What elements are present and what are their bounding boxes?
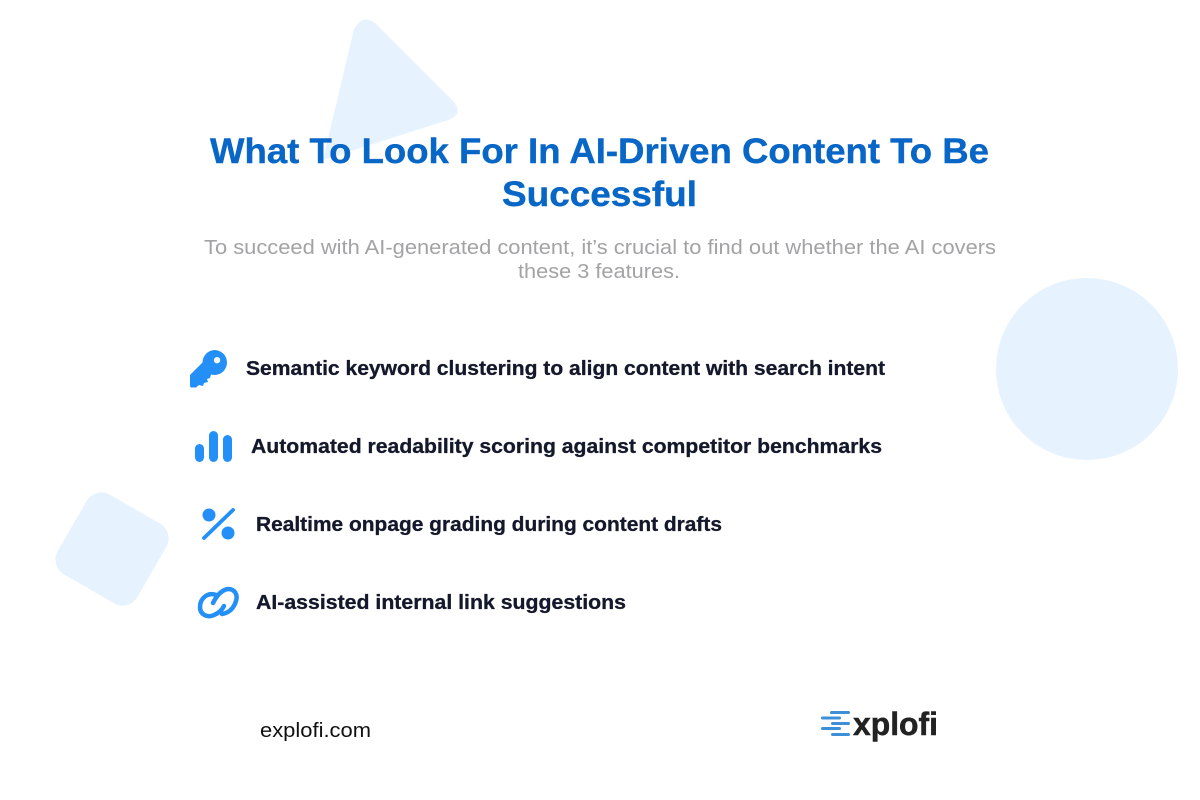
title: Successful	[502, 174, 697, 214]
subtitle: these 3 features.	[518, 261, 680, 283]
icon: bar chart	[195, 431, 232, 462]
text: readability scoring: Automated readability scoring against competitor benchmarks	[251, 436, 882, 458]
text: onpage grading: Realtime onpage grading during content drafts	[256, 514, 722, 536]
website url: explofi.com	[260, 720, 371, 742]
decorative circle	[996, 278, 1178, 460]
title	[210, 131, 989, 214]
logo wordmark: xplofi	[853, 706, 938, 742]
feature: onpage grading	[202, 508, 722, 540]
text: internal links: AI-assisted internal link suggestions	[256, 592, 626, 614]
subtitle: To succeed with AI-generated content, it’s crucial to find out whether the AI covers	[204, 237, 996, 259]
icon: chain link	[200, 589, 237, 616]
feature: internal links	[200, 589, 626, 616]
text: keyword clustering: Semantic keyword clustering to align content with search intent	[246, 358, 885, 380]
subtitle	[204, 237, 996, 283]
logo mark	[821, 711, 850, 736]
icon: key	[190, 350, 227, 388]
logo: explofi	[821, 706, 938, 742]
icon: percent	[202, 508, 234, 540]
decorative triangle	[323, 20, 458, 160]
title: What To Look For In AI-Driven Content To Be	[210, 131, 989, 171]
decorative rounded square	[49, 486, 175, 612]
feature: keyword clustering	[190, 350, 885, 388]
feature: readability scoring	[195, 431, 882, 462]
